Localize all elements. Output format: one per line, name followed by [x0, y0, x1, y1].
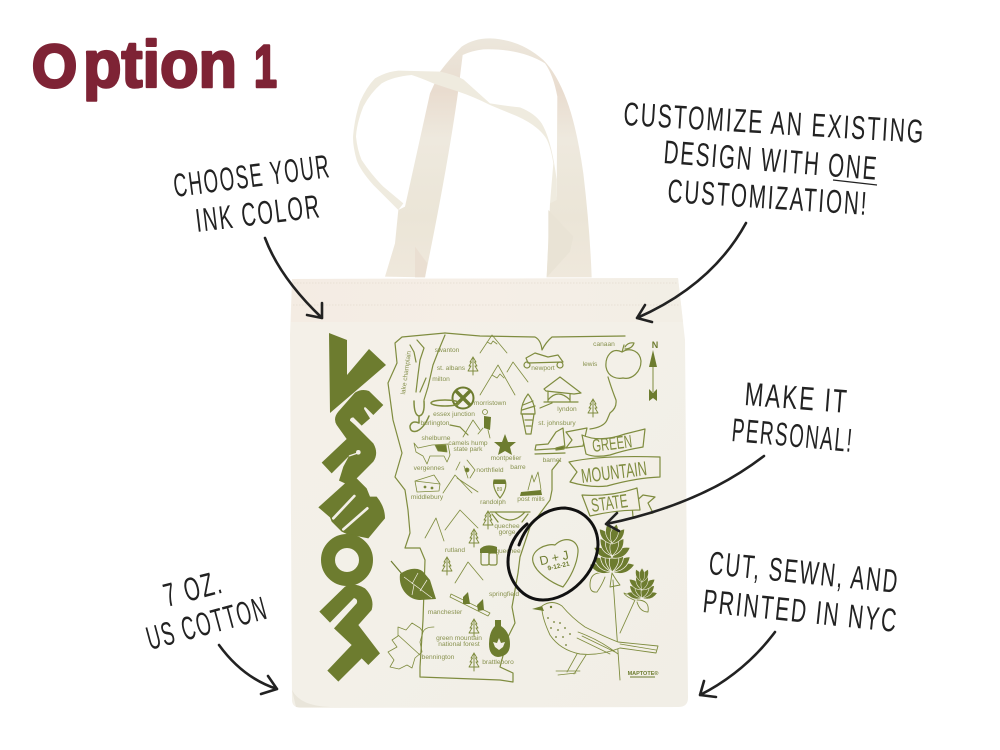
- map labels: barnet: [543, 457, 562, 464]
- icon: campfire: [520, 472, 542, 496]
- callout: choose your ink color: CHOOSE YOUR: [171, 147, 333, 204]
- map labels: barre: [510, 464, 526, 471]
- black circle annotation: [508, 508, 598, 600]
- handle: thin strap: [353, 71, 557, 210]
- icon: maple syrup jug: [489, 620, 510, 657]
- callout: choose your ink color: INK COLOR: [193, 187, 323, 239]
- map labels: st. albans: [437, 365, 466, 372]
- icon: quechee bridge: [490, 512, 530, 522]
- icon: apple: [606, 343, 641, 378]
- callout: make it personal: MAKE IT: [743, 375, 850, 420]
- map labels: newport: [531, 365, 555, 372]
- map labels: st. johnsbury: [538, 420, 576, 427]
- map labels: manchester: [428, 609, 463, 616]
- state map outline: [388, 333, 625, 682]
- callout: make it personal: PERSONAL!: [730, 411, 855, 459]
- banner: green: GREEN: [591, 431, 633, 456]
- map labels: essex junction: [433, 411, 475, 418]
- arrow: ink color: [265, 238, 322, 318]
- title: 1: [254, 33, 277, 100]
- icon: hiker: [478, 410, 491, 438]
- map labels: swanton: [435, 347, 460, 354]
- map labels: lake champlain: [400, 350, 413, 395]
- map labels: shelburne: [422, 435, 451, 442]
- icon: race car: [524, 353, 563, 368]
- map labels: morristown: [474, 400, 506, 407]
- icon: cow: [414, 443, 450, 464]
- letter V: [329, 333, 386, 413]
- icon: oak leaf: [388, 623, 434, 669]
- arrow: customize: [637, 223, 746, 322]
- icon: north compass: N: [652, 340, 658, 350]
- callout: choose your ink color: [171, 147, 333, 239]
- icon: ice cream: [521, 394, 535, 434]
- banners: green mountain state: [566, 428, 660, 517]
- icon: stethoscope: [410, 400, 459, 431]
- callout: customize an existing design: DESIGN WITH ONE: [662, 133, 880, 187]
- icon: small clover: [620, 568, 658, 633]
- map labels: post mills: [517, 496, 545, 503]
- icon: north compass: [649, 340, 658, 401]
- map labels: canaan: [593, 341, 615, 348]
- title: O: [32, 33, 77, 100]
- heart personalization: 9-12-21: [547, 561, 571, 572]
- heart personalization: D + J: [538, 548, 570, 568]
- title: [32, 27, 277, 101]
- map labels: northfield: [476, 467, 504, 474]
- map labels: randolph: [480, 499, 506, 506]
- map labels: national forest: [438, 641, 480, 648]
- mountains and trees: [425, 335, 598, 671]
- icon: beer mugs: [480, 545, 497, 565]
- handle: wide strap: [385, 38, 592, 277]
- callout: 7 oz. us cotton: [142, 563, 272, 657]
- letter O: [328, 541, 366, 579]
- map labels: state park: [454, 446, 483, 453]
- icon: covered bridge: [540, 377, 581, 408]
- banner: mountain: MOUNTAIN: [580, 458, 648, 488]
- vermont lettering: [318, 333, 386, 682]
- map labels: lewis: [583, 361, 598, 368]
- icon: railroad crossing: [452, 388, 474, 408]
- map labels: bennington: [422, 654, 455, 661]
- icon: thrush bird: [532, 602, 658, 675]
- callout: make it personal: [730, 375, 855, 459]
- map labels: vergennes: [414, 465, 445, 472]
- title: ption: [83, 27, 237, 101]
- arrow: cut, sewn: [700, 632, 775, 697]
- map labels: brattleboro: [482, 659, 514, 666]
- map labels: springfield: [489, 591, 519, 598]
- map labels: milton: [432, 376, 450, 383]
- callout: 7 oz. us cotton: US COTTON: [142, 589, 272, 657]
- tote handles: [353, 38, 592, 277]
- map labels: camels hump: [448, 440, 488, 447]
- callout: customize an existing design: CUSTOMIZATION!: [667, 172, 870, 222]
- icon: large clover: [588, 523, 636, 680]
- map labels: lyndon: [557, 406, 577, 413]
- icon: green leaf: [391, 561, 436, 600]
- arrow: cotton: [219, 645, 277, 694]
- icon: ice skate: [535, 428, 565, 454]
- callout: 7 oz. us cotton: 7 OZ.: [159, 563, 227, 614]
- icon: route 89 shield: 89: [497, 487, 502, 493]
- icon: skier: [456, 460, 478, 492]
- callout: cut, sewn, and printed in nyc: [701, 544, 901, 639]
- maptote logo: MAPTOTE®: [628, 670, 658, 677]
- map labels: green mountain: [436, 635, 482, 642]
- icon: snowshoes: [450, 592, 490, 616]
- tote body: [290, 278, 688, 708]
- icon: route 89 shield: [493, 480, 506, 498]
- icon: cheese: [415, 475, 440, 492]
- map labels: middlebury: [411, 494, 444, 501]
- callout: customize an existing design: [623, 95, 926, 222]
- letters E R M: [318, 390, 385, 538]
- map labels: rutland: [445, 547, 465, 554]
- arrow: make it personal: [606, 456, 764, 531]
- banner: state: STATE: [590, 491, 629, 517]
- map labels: quechee: [495, 548, 521, 555]
- icon: star: [494, 434, 516, 455]
- map labels: [400, 341, 615, 666]
- map labels: gorge: [499, 529, 516, 536]
- map labels: quechee: [494, 523, 520, 530]
- letters N T: [319, 585, 380, 682]
- heart personalization: [533, 540, 578, 587]
- map labels: burlington: [421, 420, 450, 427]
- map labels: montpelier: [491, 455, 522, 462]
